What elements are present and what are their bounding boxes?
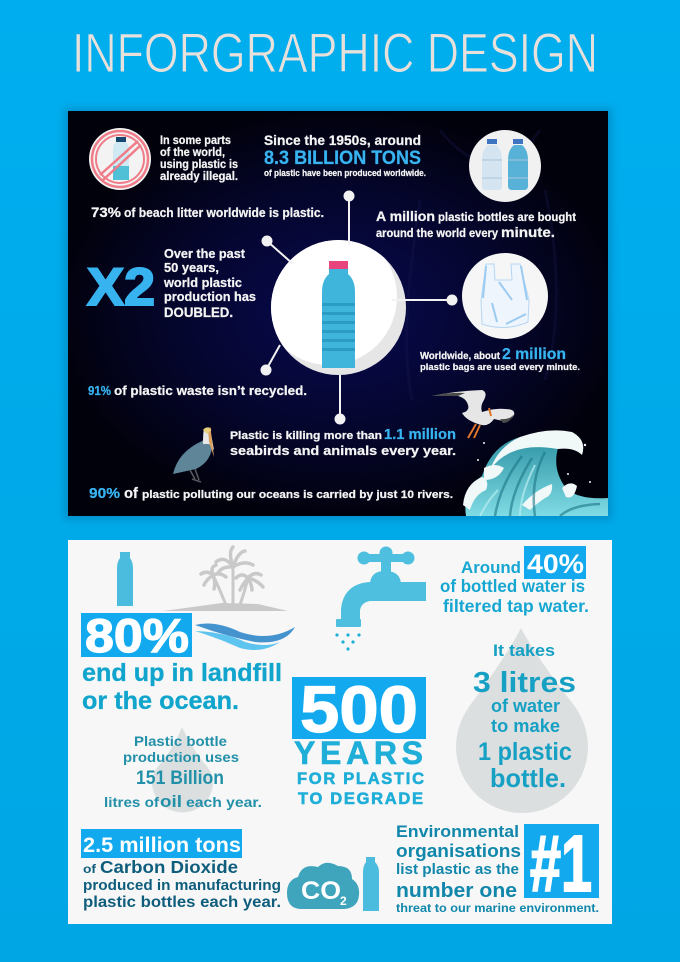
text: plastic illegal: already illegal. — [160, 171, 238, 183]
text: 2 million bags: 2 million — [502, 346, 566, 363]
text: environmental organisations: organisations — [396, 841, 521, 861]
icon: CO2 cloud: 2 — [340, 894, 347, 908]
panel: dark facts panel — [64, 108, 612, 520]
text: 91 percent not recycled: of plastic waste isn’t recycled. — [114, 384, 307, 398]
text: 2 million bags — [420, 346, 580, 373]
text: 8.3 billion tons — [264, 132, 426, 178]
text: environmental organisations: number one — [396, 880, 517, 902]
stat: 151 billion litres of oil: Plastic bottle — [134, 733, 227, 749]
stat: 151 billion litres of oil: oil — [160, 792, 182, 811]
stat: three litres in drop: bottle. — [490, 763, 566, 793]
text: 40 percent tap water: 40% — [527, 549, 584, 579]
stat: 500 years: TO DEGRADE — [298, 790, 423, 808]
stat: three litres in drop: 3 litres — [473, 667, 576, 699]
text: 90 percent ten rivers — [89, 485, 453, 502]
stat: three litres in drop: to make — [491, 716, 560, 736]
text: environmental organisations: threat to our marine environment. — [396, 901, 599, 915]
text: 90 percent ten rivers: of — [124, 485, 139, 502]
text: seabirds and animals: seabirds and animals every year. — [230, 443, 456, 458]
text: a million bottles: A million — [376, 208, 435, 224]
text: 40 percent tap water: filtered tap water. — [443, 596, 589, 616]
text: 40 percent tap water: of bottled water is — [440, 576, 585, 596]
icon: small bottle — [363, 857, 379, 911]
stat: three litres in drop — [456, 628, 588, 813]
text: production doubled: world plastic — [163, 275, 242, 290]
text: production doubled: Over the past — [164, 246, 246, 261]
text: environmental organisations: Environmental — [396, 822, 519, 841]
stat: 500 years: FOR PLASTIC — [297, 770, 424, 788]
icon: ocean wave — [463, 430, 608, 516]
panel: light facts panel — [68, 540, 612, 924]
icon: ocean waves — [195, 624, 295, 650]
text: production doubled: production has — [164, 289, 256, 304]
text: plastic illegal: of the world, — [160, 147, 225, 159]
icon: seagull — [432, 390, 514, 438]
text: 90 percent ten rivers: plastic polluting our oceans is carried by just 10 rivers. — [142, 489, 453, 501]
icon: two water bottles — [469, 130, 541, 202]
stat: three litres in drop: It takes — [493, 641, 555, 660]
text: a million bottles: plastic bottles are bought — [438, 212, 576, 224]
stat: three litres in drop: 1 plastic — [478, 738, 572, 766]
text: end up in landfill — [82, 659, 282, 715]
stat: three litres in drop: of water — [491, 696, 560, 716]
text: 40 percent tap water — [440, 546, 589, 616]
text: 40 percent tap water: Around — [461, 558, 521, 577]
text: 2.5 million tons carbon dioxide: produced in manufacturing — [83, 877, 281, 894]
text: environmental organisations: list plastic as the — [396, 861, 519, 878]
stat: 151 billion litres of oil: each year. — [186, 795, 262, 810]
stat: number one: #1 — [530, 819, 592, 908]
text: 91 percent not recycled: 91% — [88, 384, 111, 398]
text: a million bottles — [376, 208, 576, 240]
stat: 151 billion litres of oil: 151 Billion — [136, 768, 224, 789]
text: 2.5 million tons carbon dioxide: plastic bottles each year. — [83, 894, 281, 911]
text: plastic illegal: using plastic is — [160, 159, 238, 171]
text: 8.3 billion tons: of plastic have been produced worldwide. — [264, 168, 426, 178]
icon: pelican — [173, 427, 214, 482]
text: 73 percent beach litter: 73% — [91, 204, 122, 220]
icon: bottle — [117, 552, 133, 606]
text: a million bottles: around the world every — [376, 228, 499, 240]
text: 8.3 billion tons: Since the 1950s, around — [264, 132, 421, 148]
icon: palm island — [163, 547, 288, 611]
text: 73 percent beach litter: of beach litter worldwide is plastic. — [124, 206, 324, 220]
stat: 151 billion litres of oil: litres of — [104, 795, 160, 810]
text: production doubled: 50 years, — [164, 260, 219, 275]
text: 2 million bags: plastic bags are used every minute. — [420, 362, 580, 373]
stat: 151 billion litres of oil: production uses — [123, 749, 239, 765]
icon: plastic bag circle — [462, 253, 550, 339]
text: 8.3 billion tons: 8.3 BILLION TONS — [264, 147, 421, 169]
text: a million bottles: minute. — [501, 224, 555, 240]
text: seabirds and animals — [230, 426, 456, 458]
text: plastic illegal — [160, 135, 238, 183]
text: 2.5 million tons carbon dioxide: Carbon Dioxide — [100, 857, 238, 877]
text: plastic illegal: In some parts — [160, 135, 231, 147]
stat: 500 years: YEARS — [294, 735, 423, 771]
text: 2 million bags: Worldwide, about — [420, 351, 501, 362]
stat: 80 percent: 80% — [85, 609, 189, 662]
text: environmental organisations — [396, 822, 599, 915]
stat: 500 years — [292, 672, 426, 808]
text: 2.5 million tons carbon dioxide — [81, 829, 281, 911]
text: end up in landfill: end up in landfill — [82, 659, 282, 687]
text: end up in landfill: or the ocean. — [82, 687, 239, 715]
stat: 500 years: 500 — [300, 672, 418, 746]
text: seabirds and animals: 1.1 million — [384, 426, 456, 443]
icon: CO2 cloud — [287, 863, 359, 909]
icon: CO2 cloud: CO — [301, 877, 341, 905]
text: 2.5 million tons carbon dioxide: 2.5 million tons — [83, 834, 241, 857]
text: production doubled: DOUBLED. — [164, 305, 233, 320]
icon: water tap — [335, 546, 426, 651]
stat: 151 billion litres of oil — [104, 727, 262, 812]
text: 90 percent ten rivers: 90% — [89, 485, 120, 502]
text: 2.5 million tons carbon dioxide: of — [83, 862, 97, 876]
connector lines — [262, 192, 456, 424]
icon: no plastic sign — [89, 128, 151, 190]
icon: central bottle circle — [271, 240, 406, 375]
text: production doubled — [163, 246, 256, 320]
text: X2: X2 — [87, 258, 155, 317]
text: seabirds and animals: Plastic is killing more than — [230, 430, 382, 442]
